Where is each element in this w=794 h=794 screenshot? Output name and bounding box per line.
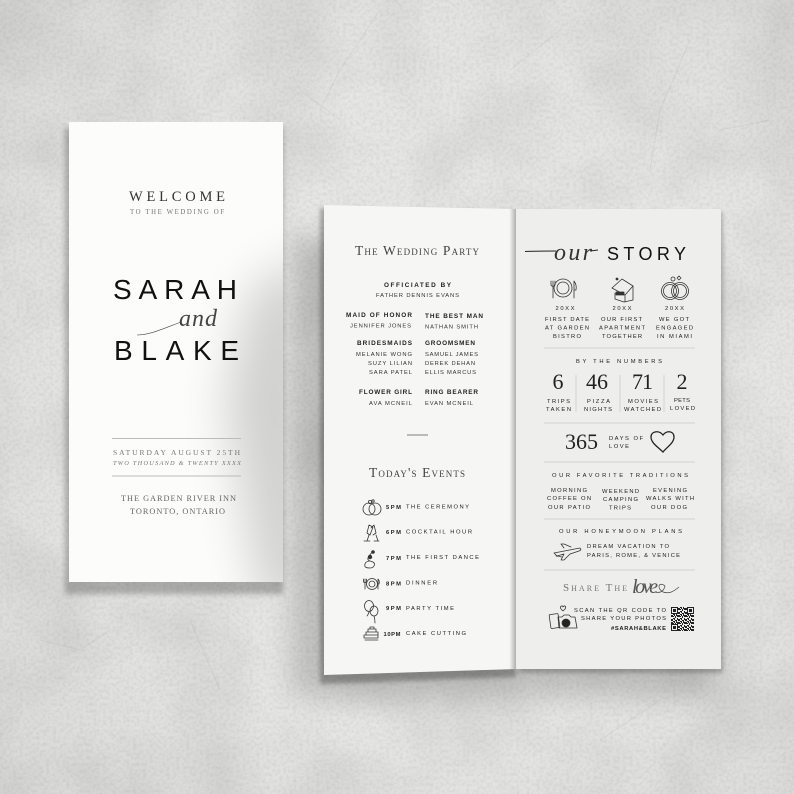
venue	[121, 494, 236, 516]
section: honeymoon plans	[554, 529, 682, 560]
qr instructions: SHARE YOUR PHOTOS	[581, 616, 666, 622]
wedding party names: ELLIS MARCUS	[425, 370, 476, 376]
stat: pets: PETS	[674, 398, 690, 404]
timeline: engaged: WE GOT	[659, 317, 689, 323]
heading: our story: STORY	[607, 244, 686, 264]
event: cocktail hour	[364, 525, 472, 541]
event: dinner: 8PM	[386, 582, 401, 588]
event: party time	[364, 600, 454, 623]
date block: SATURDAY AUGUST 25TH	[113, 448, 241, 457]
wedding party names: AVA MCNEIL	[369, 401, 413, 407]
section: share the love	[563, 576, 679, 598]
stat: pizza: 46	[586, 369, 608, 394]
event: first dance: THE FIRST DANCE	[406, 555, 479, 561]
script word: and	[137, 306, 218, 335]
stat: trips: 6	[552, 369, 564, 394]
event: ceremony	[363, 500, 469, 515]
event: party time: 9PM	[386, 606, 401, 612]
section: favorite traditions: CAMPING	[603, 497, 638, 503]
timeline: first date: AT GARDEN	[545, 326, 589, 332]
wedding party names: JENNIFER JONES	[350, 324, 411, 330]
officiant	[376, 282, 459, 299]
venue: TORONTO, ONTARIO	[130, 507, 225, 516]
section: favorite traditions: WALKS WITH	[646, 496, 694, 502]
event: cocktail hour: 6PM	[386, 530, 401, 536]
section: share the love: Share The	[563, 582, 627, 594]
event: cake cutting: 10PM	[384, 632, 401, 638]
section: honeymoon plans: PARIS, ROME, & VENICE	[587, 553, 680, 559]
event: cocktail hour: COCKTAIL HOUR	[406, 530, 472, 536]
wedding party names: THE BEST MAN	[425, 313, 483, 320]
wedding party names: FLOWER GIRL	[359, 389, 412, 396]
wedding party names: GROOMSMEN	[425, 340, 475, 347]
wedding party names: SUZY LILIAN	[368, 361, 412, 367]
event: cake cutting: CAKE CUTTING	[406, 631, 466, 637]
stat: pizza: NIGHTS	[584, 407, 612, 413]
timeline: engaged	[656, 276, 693, 340]
stat: 365 days of love: 365	[565, 429, 598, 454]
event: cake cutting	[364, 627, 466, 640]
wedding party names: NATHAN SMITH	[425, 324, 478, 330]
event: ceremony: 5PM	[386, 505, 401, 511]
heading: welcome: WELCOME	[129, 189, 225, 205]
stat: pets: 2	[676, 369, 688, 394]
stat: 365 days of love: DAYS OF	[609, 436, 643, 442]
section: by the numbers: BY THE NUMBERS	[576, 359, 662, 365]
qr instructions	[574, 608, 666, 632]
panel: inside right page	[516, 209, 723, 673]
qr instructions: SCAN THE QR CODE TO	[574, 608, 666, 614]
timeline: first date: 20XX	[556, 306, 575, 312]
event: ceremony: THE CEREMONY	[406, 504, 469, 510]
wedding party names: RING BEARER	[425, 389, 478, 396]
stat: pets: LOVED	[670, 406, 695, 412]
wedding party names: EVAN MCNEIL	[425, 401, 474, 407]
wedding party names: DEREK DEHAN	[425, 361, 475, 367]
heading: today's events: Today's Events	[369, 465, 465, 480]
section: favorite traditions: COFFEE ON	[547, 496, 591, 502]
section: honeymoon plans: DREAM VACATION TO	[587, 544, 669, 550]
script word: and: and	[179, 306, 218, 332]
stat: movies	[624, 369, 661, 413]
section: favorite traditions: OUR FAVORITE TRADITIONS	[552, 473, 688, 479]
officiant: FATHER DENNIS EVANS	[376, 293, 459, 299]
wedding party names: BRIDESMAIDS	[357, 340, 413, 347]
section: by the numbers	[546, 359, 695, 413]
section: favorite traditions: OUR PATIO	[548, 505, 590, 511]
section: favorite traditions: WEEKEND	[602, 489, 639, 495]
event: party time: PARTY TIME	[406, 606, 454, 612]
wedding party names: MELANIE WONG	[356, 352, 412, 358]
event: first dance: 7PM	[386, 556, 401, 562]
section: favorite traditions: EVENING	[653, 488, 687, 494]
qr instructions: #SARAH&BLAKE	[611, 626, 666, 632]
timeline: first date: BISTRO	[553, 334, 581, 340]
date block: TWO THOUSAND & TWENTY XXXX	[113, 460, 242, 467]
name: Blake: BLAKE	[114, 335, 239, 366]
stat: movies: MOVIES	[628, 399, 658, 405]
heading: our story: our	[554, 240, 593, 266]
section: share the love: love	[632, 576, 658, 598]
timeline: first apartment: 20XX	[612, 306, 632, 312]
wedding party names: SAMUEL JAMES	[425, 352, 478, 358]
wedding party names: SARA PATEL	[369, 370, 413, 376]
icon: heart	[651, 432, 674, 452]
timeline: engaged: 20XX	[665, 306, 684, 312]
date block	[112, 438, 242, 476]
soft shadow around inside spread	[292, 238, 712, 696]
qr code	[671, 607, 694, 631]
subheading: to the wedding of: TO THE WEDDING OF	[130, 209, 224, 216]
wedding party names: MAID OF HONOR	[346, 312, 412, 319]
timeline: first apartment: APARTMENT	[599, 326, 645, 332]
panel: front cover card	[62, 122, 286, 597]
section: favorite traditions: OUR DOG	[651, 505, 687, 511]
panel: inside left page	[320, 205, 516, 684]
timeline: first date	[545, 279, 589, 340]
timeline: engaged: ENGAGED	[656, 326, 693, 332]
timeline: first date: FIRST DATE	[545, 317, 589, 323]
stat: 365 days of love: LOVE	[609, 444, 629, 450]
heading: the wedding party: The Wedding Party	[355, 243, 480, 258]
event: dinner: DINNER	[406, 580, 437, 586]
wedding party names	[346, 312, 483, 407]
heading: our story	[525, 240, 686, 266]
stat: trips: TAKEN	[546, 407, 571, 413]
timeline: engaged: IN MIAMI	[657, 334, 692, 340]
event: dinner	[364, 578, 437, 590]
stat: movies: 71	[632, 369, 653, 394]
stat: trips: TRIPS	[547, 399, 570, 405]
stat: pizza	[584, 369, 612, 413]
section: favorite traditions: TRIPS	[609, 506, 631, 512]
stat: pizza: PIZZA	[587, 399, 610, 405]
venue: THE GARDEN RIVER INN	[121, 494, 236, 503]
stat: movies: WATCHED	[624, 407, 661, 413]
stat: trips	[546, 369, 571, 413]
icon: camera	[549, 606, 577, 629]
timeline: first apartment: OUR FIRST	[601, 317, 642, 323]
section: favorite traditions: MORNING	[551, 488, 587, 494]
icon: airplane	[554, 544, 581, 560]
timeline: first apartment: TOGETHER	[602, 334, 642, 340]
event: first dance	[365, 550, 479, 568]
stat: 365 days of love	[565, 429, 674, 454]
timeline: first apartment	[599, 278, 645, 340]
officiant: OFFICIATED BY	[384, 282, 452, 289]
name: Sarah: SARAH	[113, 274, 237, 305]
section: favorite traditions	[547, 473, 694, 512]
section: honeymoon plans: OUR HONEYMOON PLANS	[559, 529, 682, 535]
stat: pets	[670, 369, 695, 412]
